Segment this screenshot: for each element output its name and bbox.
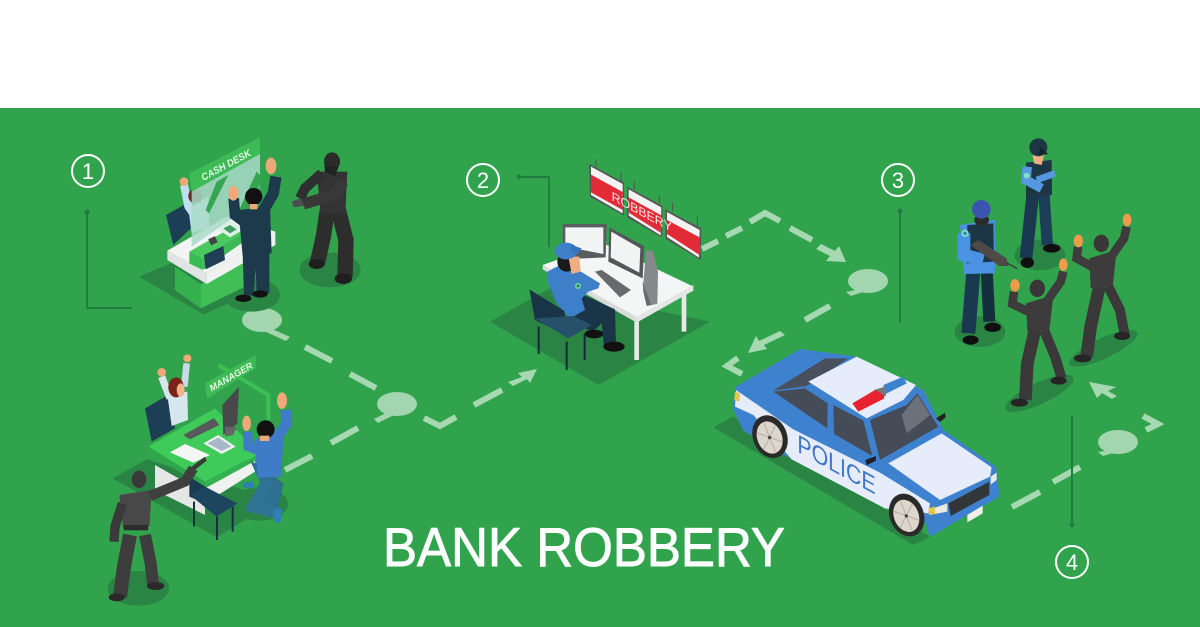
number 1: 1 — [82, 159, 94, 184]
number 3: 3 — [892, 168, 904, 193]
man in suit with raised hands — [228, 158, 276, 302]
scene 3: police officers arrest robbers — [955, 138, 1141, 419]
scene 2: manager office — [108, 354, 288, 606]
robbery alarm sign: ROBBERY — [612, 189, 672, 235]
officer with crossed arms — [1021, 138, 1060, 268]
dashed route path — [285, 213, 1158, 507]
manager sign: MANAGER — [208, 360, 255, 393]
route arrows — [508, 244, 1117, 399]
security desk — [543, 243, 693, 360]
police car — [713, 349, 999, 545]
number 3 — [882, 164, 914, 196]
number 4: 4 — [1066, 550, 1078, 575]
monitors and keyboard — [563, 224, 658, 306]
title: BANK ROBBERY — [383, 516, 785, 578]
cashier chair — [166, 203, 193, 245]
robber aiming — [109, 457, 207, 601]
guard chair — [529, 289, 592, 370]
man in blue with raised hands — [242, 392, 287, 523]
manager sign — [205, 355, 268, 420]
computer monitor — [222, 387, 239, 437]
scene 2: monitoring station — [490, 159, 710, 385]
scene 1: cash desk robbery — [139, 137, 361, 314]
number 1 — [72, 155, 104, 187]
cash desk — [167, 217, 275, 308]
front wheel — [883, 488, 931, 542]
glass partition with sign: CASH DESK — [200, 148, 254, 184]
location bubbles on route — [242, 269, 1138, 456]
number 2 — [467, 164, 499, 196]
glass partition with sign — [189, 137, 260, 247]
police lettering: POLICE — [797, 428, 876, 500]
callout lines — [84, 174, 1074, 528]
woman manager — [157, 354, 191, 426]
security guard at desk — [547, 243, 625, 352]
officer with rifle — [960, 200, 1017, 345]
robber with hands up, rear — [1074, 214, 1131, 362]
number 2: 2 — [477, 168, 489, 193]
manager desk — [148, 408, 260, 515]
cashier woman — [180, 177, 209, 233]
robber with gun — [292, 152, 352, 284]
police light bar — [852, 377, 907, 412]
visitor chair — [189, 477, 237, 540]
manager chair — [145, 395, 175, 442]
robber with hands up, front — [1010, 258, 1068, 407]
rear wheel — [746, 410, 794, 463]
robbery alarm sign — [589, 159, 701, 260]
number 4 — [1056, 546, 1088, 578]
